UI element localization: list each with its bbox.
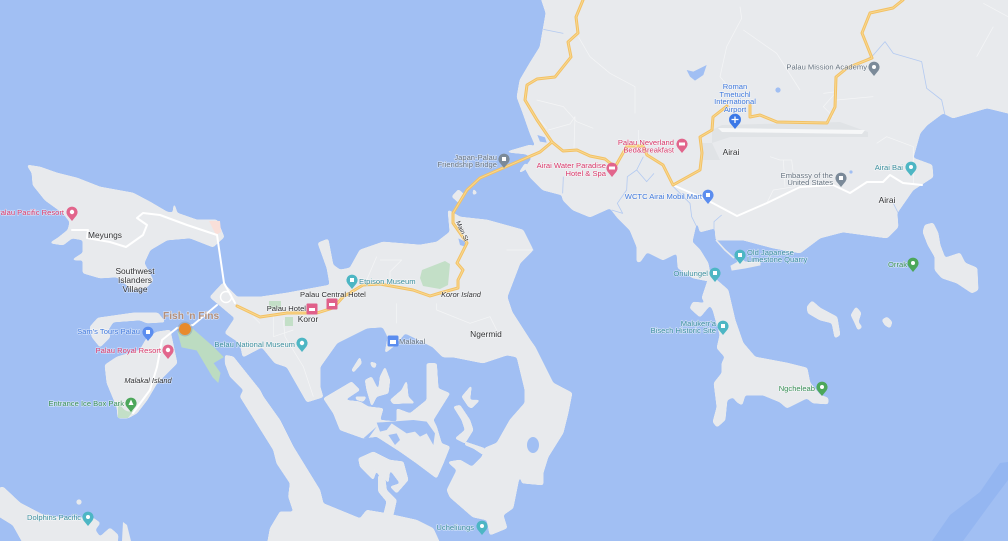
- pin: Airai Bai: [875, 162, 917, 176]
- place labels: Meyungs: [88, 230, 122, 240]
- small ponds: [775, 87, 853, 174]
- island: quarry spit: [716, 240, 760, 270]
- pin: Palau Royal Resort: Palau Royal Resort: [96, 346, 162, 355]
- reef band in the bottom right: [932, 462, 1008, 541]
- gold main highway: [237, 0, 903, 317]
- pin: Ngcheleab: Ngcheleab: [779, 384, 815, 393]
- pin: Palau Pacific Resort: [0, 207, 78, 221]
- pin: Bisech Historic Site: Bisech Historic Site: [651, 326, 716, 335]
- place labels: Airai: [723, 147, 740, 157]
- pin: Roman Tmetuchl International Airport: [714, 82, 756, 129]
- pin: Palau Neverland Bed and Breakfast: [618, 138, 688, 154]
- pin: Sam's Tours Palau: Sam's Tours Palau: [77, 327, 140, 336]
- pin: Embassy of the United States: Embassy of the: [781, 171, 833, 180]
- pin: Dolphins Pacific: [27, 512, 94, 526]
- pin: Palau Mission Academy: [786, 62, 880, 76]
- place labels: Islanders: [118, 275, 152, 285]
- pin: Belau National Museum: [214, 338, 308, 352]
- place labels: Village: [122, 284, 148, 294]
- pin: Embassy of the United States: [781, 171, 847, 187]
- landmass: southern Airai peninsula: [690, 277, 828, 427]
- hotel marker: Palau Hotel: Palau Hotel: [267, 304, 306, 313]
- place labels: Malakal Island: [124, 376, 173, 385]
- lake on the eastern Koror arm: [527, 437, 539, 453]
- pin: Etpison Museum: Etpison Museum: [359, 277, 416, 286]
- pin: Palau Neverland Bed and Breakfast: Bed&Breakfast: [623, 146, 675, 154]
- pin: Roman Tmetuchl International Airport: International: [714, 97, 756, 106]
- island: Orrak: [923, 223, 978, 293]
- pin: Roman Tmetuchl International Airport: Airport: [724, 105, 747, 114]
- pin: Etpison Museum: [346, 275, 416, 289]
- Koror parks: [269, 261, 450, 326]
- place labels: Main St: [454, 220, 469, 243]
- hotel marker: Palau Central Hotel: [300, 290, 366, 310]
- pin: Orrak: Orrak: [888, 260, 907, 269]
- place labels: Malakal: [399, 337, 425, 346]
- pin: Bisech Historic Site: [651, 319, 729, 335]
- landmass: Koror: [210, 210, 572, 535]
- pin: WCTC Airai Mobil Mart: WCTC Airai Mobil Mart: [625, 192, 703, 201]
- pin: Airai Water Paradise Hotel and Spa: Hotel & Spa: [565, 169, 607, 178]
- pin: Palau Mission Academy: Palau Mission Academy: [786, 62, 867, 72]
- minor roads: [253, 3, 1008, 397]
- highlighted location: Fish 'n Fins: [163, 311, 220, 336]
- pin: Japan-Palau Friendship Bridge: [437, 153, 510, 169]
- pin: Embassy of the United States: United States: [787, 178, 833, 187]
- pin: WCTC Airai Mobil Mart: [625, 190, 714, 204]
- landmass: Babeldaob and Airai: [506, 0, 1008, 281]
- rock islands inside the bay: [225, 355, 485, 541]
- place labels: Koror Island: [441, 290, 482, 299]
- place labels: [88, 147, 896, 385]
- pin: Ucheliungs: [436, 521, 488, 535]
- pin: Oriulungel: Oriulungel: [673, 269, 708, 278]
- pin: Palau Neverland Bed and Breakfast: Palau Neverland: [618, 138, 674, 147]
- place labels: Koror: [298, 314, 318, 324]
- place labels: Ngermid: [470, 329, 502, 339]
- pin: Entrance Ice Box Park: [48, 398, 137, 412]
- hotel marker: Palau Hotel: [267, 304, 318, 314]
- pin: Roman Tmetuchl International Airport: Tmetuchl: [719, 90, 751, 99]
- pin: Japan-Palau Friendship Bridge: Japan-Palau: [454, 153, 497, 162]
- pin: Airai Water Paradise Hotel and Spa: Airai Water Paradise: [537, 161, 606, 170]
- pin: Bisech Historic Site: Malukerr'a: [681, 319, 717, 328]
- pin: Belau National Museum: Belau National Museum: [214, 340, 295, 349]
- pin: Airai Water Paradise Hotel and Spa: [537, 161, 618, 178]
- pin: Old Japanese Limestone Quarry: Limestone Quarry: [747, 255, 808, 264]
- pin: Orrak: [888, 258, 919, 272]
- place labels: Southwest: [115, 266, 155, 276]
- pin: Roman Tmetuchl International Airport: Roman: [723, 82, 747, 91]
- white secondary roads: [72, 175, 922, 413]
- resort ground near the bridge: [209, 221, 221, 235]
- highlighted location: Fish 'n Fins: Fish 'n Fins: [163, 311, 220, 322]
- pin: Old Japanese Limestone Quarry: Old Japanese: [747, 248, 794, 257]
- pin: Oriulungel: [673, 268, 721, 282]
- pin: Airai Bai: Airai Bai: [875, 163, 903, 172]
- streams: [543, 29, 945, 240]
- island: green park near Fish 'n Fins: [178, 327, 223, 382]
- pin: Sam's Tours Palau: [77, 327, 154, 341]
- island: Dolphins Pacific shore: [0, 487, 131, 541]
- pin: Old Japanese Limestone Quarry: [734, 248, 808, 264]
- small eastern islands: [807, 301, 892, 338]
- island: Meyungs: [27, 165, 224, 290]
- bridge piers: [452, 65, 707, 247]
- marker: Malakal: [388, 336, 398, 346]
- pin: Ngcheleab: [779, 382, 828, 396]
- pin: Palau Royal Resort: [96, 345, 174, 359]
- place labels: Airai: [879, 195, 896, 205]
- island: Malakal: [90, 313, 177, 418]
- pin: Dolphins Pacific: Dolphins Pacific: [27, 513, 81, 522]
- pin: Ucheliungs: Ucheliungs: [436, 523, 474, 532]
- hotel marker: Palau Central Hotel: Palau Central Hotel: [300, 290, 366, 299]
- pin: Entrance Ice Box Park: Entrance Ice Box Park: [48, 399, 124, 408]
- pin: Japan-Palau Friendship Bridge: Friendship Bridge: [437, 160, 497, 169]
- airport runway and apron: [700, 122, 868, 160]
